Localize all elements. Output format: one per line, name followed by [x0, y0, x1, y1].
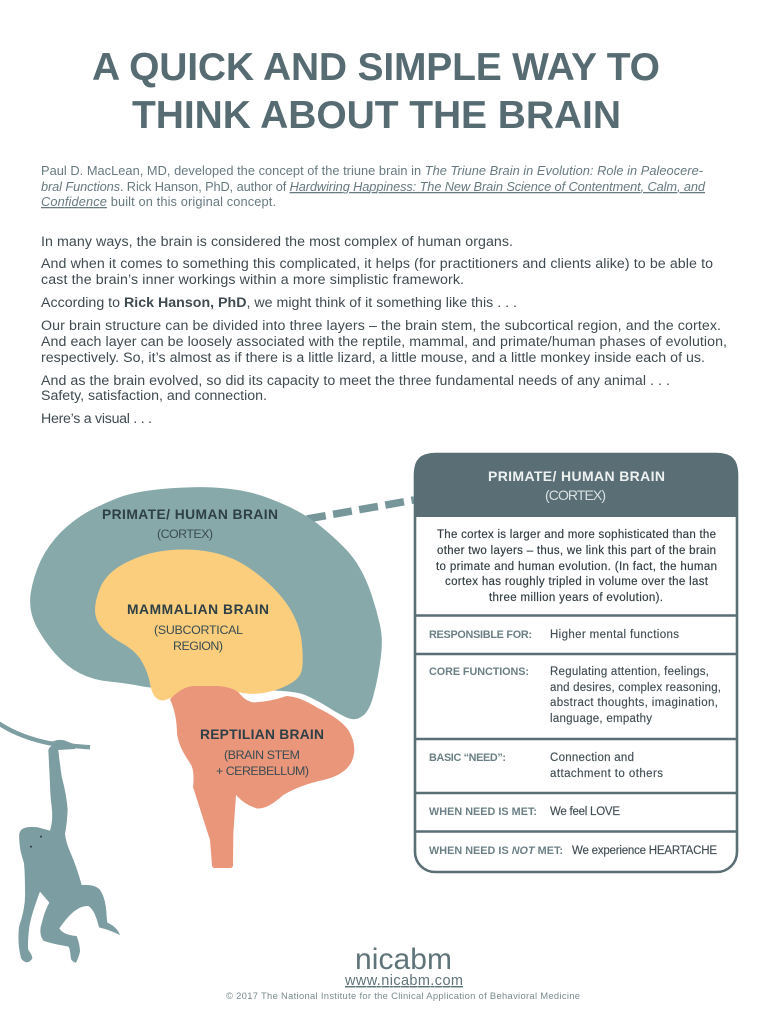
- row: core functions: [429, 666, 721, 725]
- connector: dashed line to panel: [307, 500, 414, 519]
- label: reptilian brain: REPTILIAN BRAIN: [200, 727, 324, 742]
- intro citation text: Paul D. MacLean, MD, developed the concept of the triune brain in The Triune Brain in Evolution: Role in Paleocere-: [41, 163, 703, 178]
- panel header: PRIMATE/ HUMAN BRAIN: [488, 468, 665, 484]
- title: THINK ABOUT THE BRAIN: [132, 94, 621, 137]
- panel description: three million years of evolution).: [489, 592, 663, 604]
- brain layer: mammalian: [95, 549, 303, 700]
- label: mammalian brain: REGION): [173, 639, 223, 653]
- body text: Our brain structure can be divided into three layers – the brain stem, the subcortical region, and the cortex.: [41, 318, 721, 334]
- title: A QUICK AND SIMPLE WAY TO: [92, 46, 660, 89]
- panel description: [436, 529, 717, 604]
- body text: cast the brain’s inner workings within a more simplistic framework.: [41, 272, 464, 288]
- panel description: to primate and human evolution. (In fact, the human: [436, 561, 717, 573]
- title: [92, 46, 660, 137]
- body text: According to Rick Hanson, PhD, we might think of it something like this . . .: [41, 295, 517, 311]
- row: when need is met: We feel LOVE: [550, 806, 620, 818]
- brain layer: reptilian: [170, 686, 354, 868]
- label: mammalian brain: MAMMALIAN BRAIN: [127, 602, 269, 617]
- body text: And as the brain evolved, so did its capacity to meet the three fundamental needs of any animal . . .: [41, 373, 670, 389]
- row: responsible for: Higher mental functions: [550, 629, 679, 641]
- body text: Safety, satisfaction, and connection.: [41, 388, 267, 404]
- row: core functions: language, empathy: [550, 713, 652, 725]
- copyright: © 2017 The National Institute for the Clinical Application of Behavioral Medicine: [226, 990, 580, 1001]
- body text: Here’s a visual . . .: [41, 411, 152, 427]
- label: reptilian brain: [200, 727, 324, 778]
- logo wordmark: nicabm: [355, 943, 452, 976]
- row: core functions: and desires, complex reasoning,: [550, 682, 721, 694]
- footer: [226, 943, 580, 1001]
- row: when need is met: WHEN NEED IS MET:: [429, 806, 537, 818]
- label: mammalian brain: [127, 602, 269, 653]
- intro citation text: [41, 163, 706, 209]
- panel: primate / human brain details: [414, 453, 738, 872]
- panel description: cortex has roughly tripled in volume over the last: [445, 576, 709, 588]
- label: primate brain: [102, 507, 278, 541]
- row: when need is not met: WHEN NEED IS NOT MET:: [429, 845, 563, 857]
- label: primate brain: PRIMATE/ HUMAN BRAIN: [102, 507, 278, 522]
- row: basic need: Connection and: [550, 752, 634, 764]
- body text: [41, 234, 727, 427]
- row: when need is not met: We experience HEARTACHE: [572, 845, 717, 857]
- body text: In many ways, the brain is considered the most complex of human organs.: [41, 234, 513, 250]
- row: core functions: abstract thoughts, imagination,: [550, 697, 718, 709]
- label: reptilian brain: (BRAIN STEM: [224, 748, 300, 762]
- brain diagram: [30, 487, 414, 868]
- row: responsible for: RESPONSIBLE FOR:: [429, 629, 532, 641]
- row: basic need: BASIC “NEED”:: [429, 752, 506, 764]
- row: responsible for: [429, 629, 679, 641]
- row: basic need: attachment to others: [550, 768, 663, 780]
- body text: respectively. So, it’s almost as if there is a little lizard, a little mouse, and a little monkey inside each of us.: [41, 350, 705, 366]
- website link: www.nicabm.com: [344, 973, 463, 989]
- panel header: (CORTEX): [545, 487, 606, 503]
- panel header: [414, 453, 738, 517]
- label: primate brain: (CORTEX): [157, 527, 213, 541]
- row: core functions: Regulating attention, feelings,: [550, 666, 709, 678]
- body text: And when it comes to something this complicated, it helps (for practitioners and clients alike) to be able to: [41, 256, 713, 272]
- row: when need is met: [429, 806, 620, 818]
- label: mammalian brain: (SUBCORTICAL: [154, 623, 243, 637]
- icon: monkey hanging from vine: [0, 723, 120, 963]
- body text: And each layer can be loosely associated with the reptile, mammal, and primate/human phases of evolution,: [41, 334, 727, 350]
- row: when need is not met: [429, 845, 717, 857]
- intro citation text: Confidence built on this original concept.: [41, 194, 276, 209]
- label: reptilian brain: + CEREBELLUM): [216, 764, 309, 778]
- panel description: other two layers – thus, we link this part of the brain: [437, 545, 716, 557]
- row: core functions: CORE FUNCTIONS:: [429, 666, 529, 678]
- row: basic need: [429, 752, 663, 780]
- brain layer: cortex: [30, 487, 382, 719]
- panel description: The cortex is larger and more sophisticated than the: [437, 529, 716, 541]
- intro citation text: bral Functions. Rick Hanson, PhD, author of Hardwiring Happiness: The New Brain Science of Contentment, Calm, and: [41, 179, 706, 194]
